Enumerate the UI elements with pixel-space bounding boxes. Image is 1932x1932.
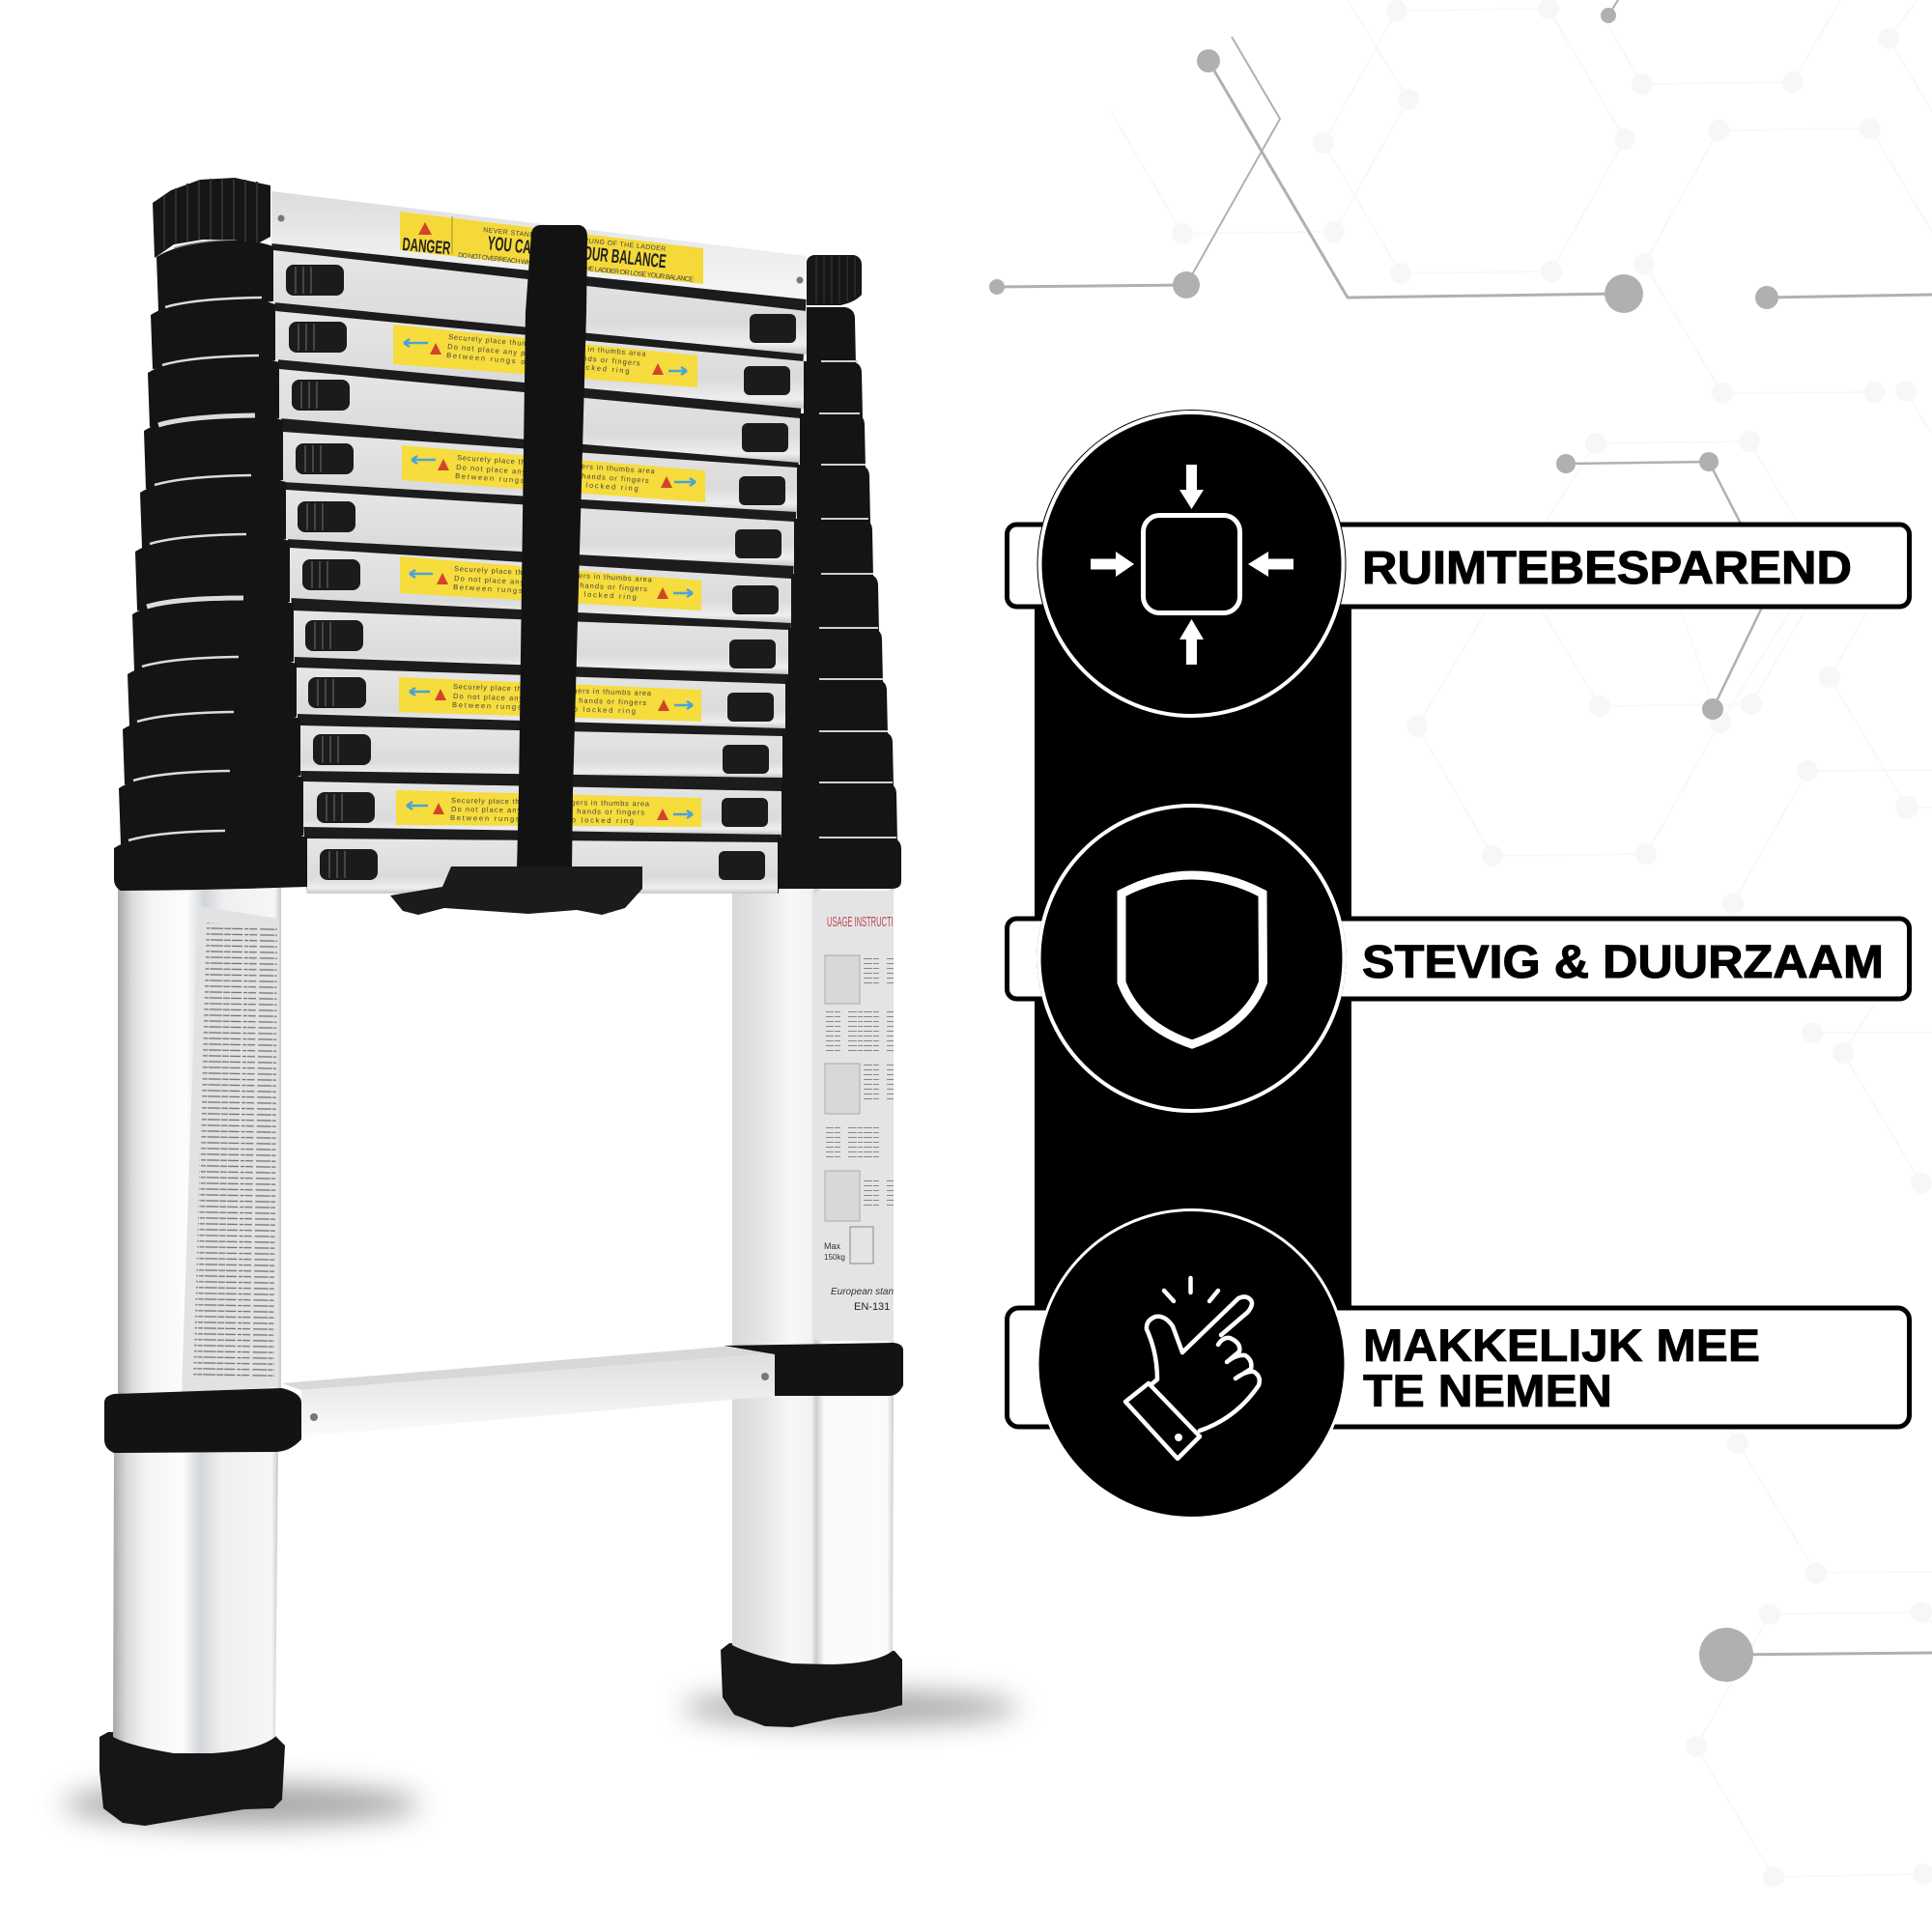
right collar (724, 1343, 903, 1396)
right lower tube (732, 1396, 894, 1664)
icon circle: shield (1037, 804, 1347, 1113)
black carrying handle (390, 867, 642, 915)
left collar (104, 1388, 301, 1453)
floor shadows (63, 1690, 1019, 1826)
yellow warning label 1 (393, 325, 697, 387)
right upper tube (732, 884, 894, 1348)
left clamp highlights (128, 240, 262, 840)
label: makkelijk mee te nemen: TE NEMEN (1363, 1365, 1612, 1416)
rungs with latches (273, 250, 807, 894)
left upper tube (118, 884, 281, 1396)
yellow warning label 2: Securely place thumbs and fingers in thumbs area (457, 453, 656, 475)
yellow warning label 1: Securely place thumbs and fingers in thumbs area (448, 332, 647, 358)
right tube usage sticker: USAGE INSTRUCTIONS (827, 914, 909, 930)
right foot (721, 1643, 902, 1727)
danger label: YOU CAN LOSE YOUR BALANCE (486, 233, 668, 272)
yellow warning label 3: Do not place any part of your hands or fingers (454, 574, 647, 593)
yellow warning label 4: Between rungs or close to locked ring (452, 700, 636, 716)
black vertical band behind icons (1035, 604, 1351, 1309)
danger label (400, 212, 703, 284)
yellow warning label 1: Do not place any part of your hands or fingers (447, 342, 640, 367)
label: ruimtebesparend (1007, 525, 1909, 607)
top left ribbed cap (153, 178, 270, 258)
yellow warning label 5: Between rungs or close to locked ring (450, 813, 634, 825)
right tube usage sticker (814, 891, 894, 1341)
right tube usage sticker: Max (824, 1241, 841, 1251)
yellow warning label 2 (402, 445, 705, 502)
rung backing (271, 237, 807, 894)
danger label: DANGER (402, 235, 451, 259)
yellow warning label 5 (396, 790, 701, 827)
yellow warning label 3: Between rungs or close to locked ring (453, 582, 637, 602)
right black clamps (778, 307, 901, 889)
yellow warning label 4: Securely place thumbs and fingers in thumbs area (453, 682, 652, 697)
left foot (99, 1732, 285, 1826)
yellow warning label 2: Do not place any part of your hands or fingers (456, 463, 649, 485)
background: molecular hexagon network (989, 0, 1932, 1888)
yellow warning label 5: Securely place thumbs and fingers in thumbs area (451, 796, 650, 809)
right tube usage sticker: EN-131 (854, 1301, 890, 1313)
top plate (271, 191, 807, 299)
label: stevig en duurzaam (1007, 919, 1909, 999)
right clamp highlights (819, 361, 896, 838)
right tube usage sticker: European standard (831, 1287, 914, 1297)
icon circle: hand snapping fingers (1037, 1209, 1346, 1519)
plate bolts (278, 214, 804, 284)
bottom crossbar rung (282, 1347, 775, 1436)
label: makkelijk mee te nemen: MAKKELIJK MEE (1363, 1320, 1760, 1371)
danger label: NEVER STAND ON THE TOP RUNG OF THE LADDER (483, 227, 666, 253)
yellow warning label 2: Between rungs or close to locked ring (455, 471, 639, 493)
label: makkelijk mee te nemen (1007, 1308, 1909, 1427)
yellow warning label 4: Do not place any part of your hands or fingers (453, 692, 646, 707)
yellow warning label 1: Between rungs or close to locked ring (446, 351, 630, 376)
yellow warning label 5: Do not place any part of your hands or fingers (451, 805, 644, 816)
left black clamps (114, 240, 307, 891)
yellow warning label 4 (399, 677, 701, 722)
label: ruimtebesparend: RUIMTEBESPAREND (1362, 543, 1852, 594)
left tube instruction sticker (182, 906, 279, 1393)
danger label: DO NOT OVERREACH WHILE STANDING ON THE LADDER OR LOSE YOUR BALANCE (458, 252, 695, 284)
ladder photo (63, 178, 1019, 1826)
yellow warning label 3 (400, 556, 701, 611)
right tube usage sticker: 150kg (824, 1253, 845, 1262)
top right ribbed cap (807, 255, 862, 305)
left lower tube (113, 1449, 278, 1753)
yellow warning label 3: Securely place thumbs and fingers in thumbs area (454, 564, 653, 583)
left latches (286, 265, 378, 880)
label: stevig en duurzaam: STEVIG & DUURZAAM (1362, 937, 1884, 988)
right latches (719, 314, 796, 880)
icon circle: compact square with inward arrows (1037, 410, 1347, 719)
velcro strap (517, 225, 587, 869)
